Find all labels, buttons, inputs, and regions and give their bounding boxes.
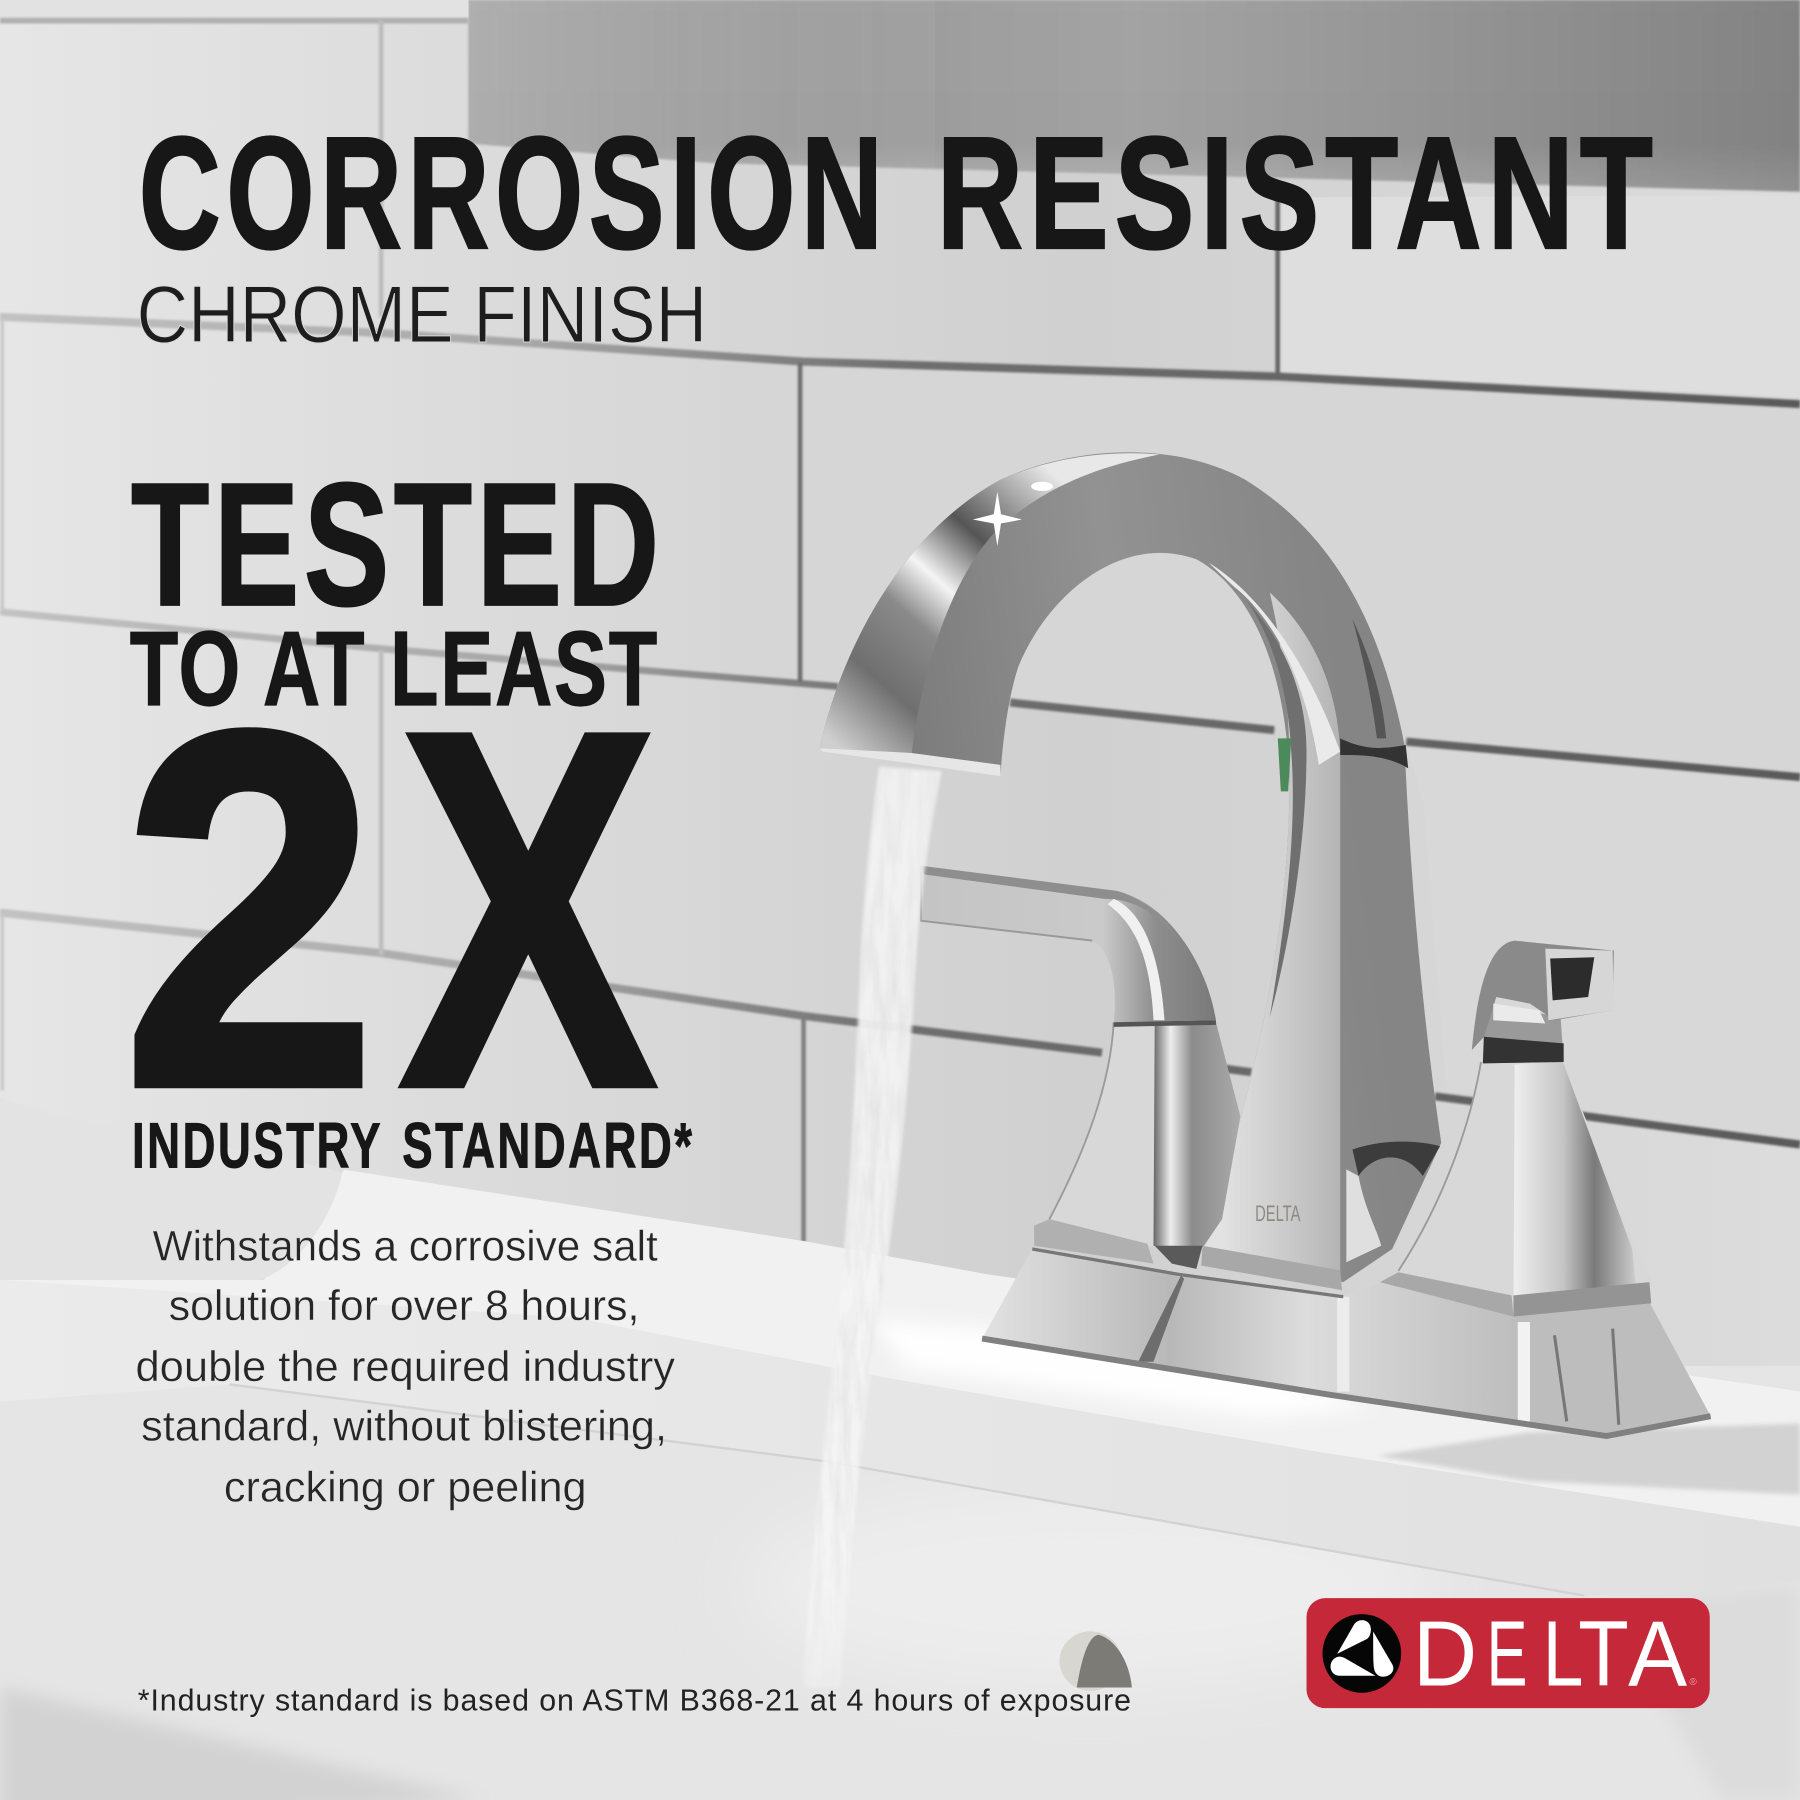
left cone base — [1034, 1020, 1240, 1269]
column front — [1202, 592, 1340, 1276]
description text: solution for over 8 hours, — [169, 1282, 639, 1329]
right column reflections — [1340, 738, 1408, 768]
Delta logo: A — [1628, 1601, 1687, 1705]
spout arch and column — [820, 452, 1441, 1290]
claim headline: X — [401, 628, 657, 1191]
Delta logo: D — [1413, 1601, 1477, 1705]
Delta logo: E — [1486, 1601, 1527, 1705]
background: counter and sink — [0, 1097, 1800, 1800]
Delta logo — [1307, 1598, 1710, 1708]
inner chrome reflection — [1209, 563, 1340, 765]
claim headline: 2 — [123, 628, 377, 1191]
left lever handle — [921, 866, 1216, 1027]
faucet illustration — [820, 452, 1711, 1436]
water stream — [804, 767, 941, 1688]
deck plate — [982, 1249, 1711, 1436]
footnote: *Industry standard is based on ASTM B368-21 at 4 hours of exposure — [138, 1682, 1132, 1717]
subtitle: CHROME FINISH — [137, 270, 707, 360]
description text: cracking or peeling — [224, 1464, 587, 1511]
description text: standard, without blistering, — [141, 1403, 667, 1450]
counter front face — [0, 1280, 1800, 1596]
counter top — [0, 1170, 1800, 1527]
description text: Withstands a corrosive salt — [153, 1222, 658, 1269]
claim headline — [123, 447, 695, 1191]
Delta logo: L — [1543, 1601, 1583, 1705]
column base strip — [1201, 1246, 1342, 1290]
right cone base — [1380, 1061, 1652, 1317]
sparkle — [973, 492, 1022, 546]
description text: double the required industry — [135, 1343, 676, 1390]
title — [139, 104, 1659, 282]
Delta logo: T — [1578, 1601, 1629, 1705]
description text — [135, 1222, 676, 1511]
drain hole — [1060, 1631, 1132, 1691]
claim headline: TESTED — [131, 447, 664, 643]
right cross handle — [1472, 941, 1614, 1063]
claim headline: INDUSTRY STANDARD* — [132, 1109, 695, 1181]
Delta logo: ® — [1689, 1677, 1697, 1688]
title: CORROSION — [139, 104, 889, 282]
claim headline: TO AT LEAST — [130, 610, 659, 728]
soap dish — [0, 1097, 342, 1280]
logo engraving: DELTA — [1255, 1200, 1301, 1226]
